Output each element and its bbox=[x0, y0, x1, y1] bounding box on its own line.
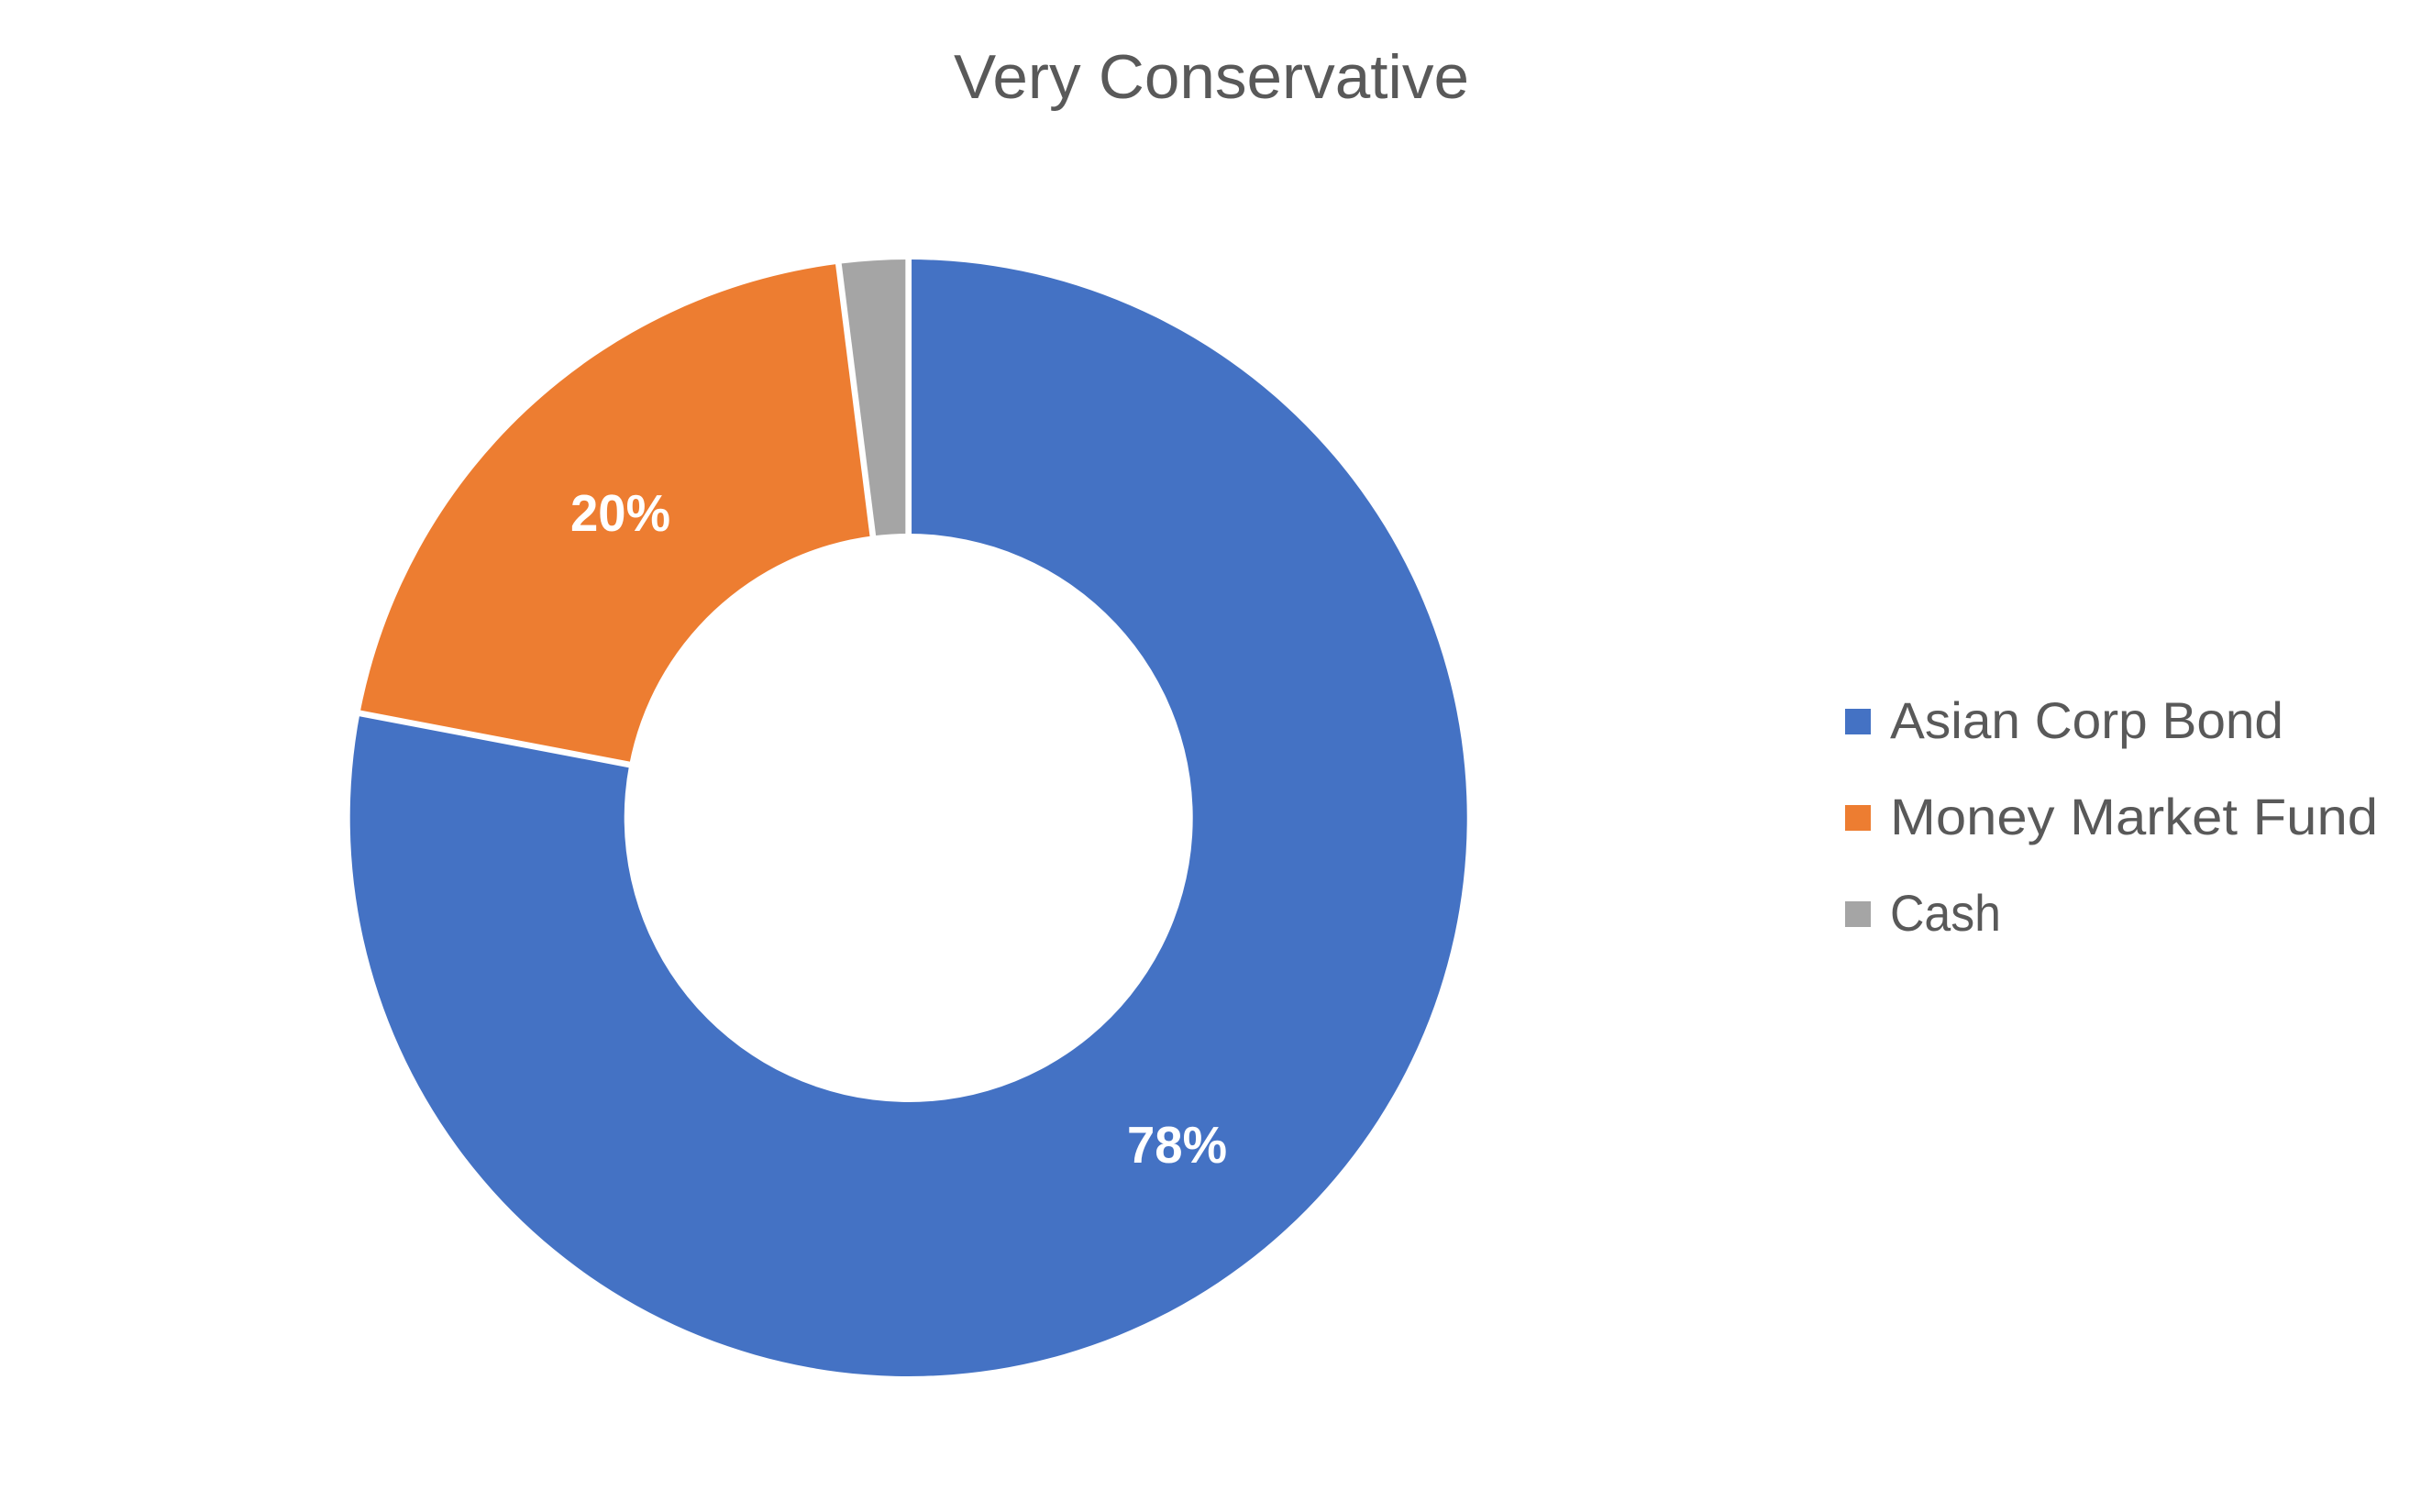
legend item: Money Market Fund: Money Market Fund bbox=[1890, 788, 2378, 845]
legend bbox=[1845, 691, 2378, 942]
title: Very Conservative bbox=[954, 42, 1469, 112]
data label: 78%: 78% bbox=[1127, 1116, 1227, 1175]
legend item: Cash bbox=[1845, 884, 2001, 942]
slice: Cash 2% bbox=[838, 259, 909, 535]
legend item: Cash: Cash bbox=[1890, 884, 2001, 942]
donut chart bbox=[350, 252, 1467, 1376]
slice: Asian Corp Bond 78% bbox=[350, 259, 1467, 1376]
slice: Money Market Fund 20% bbox=[359, 264, 873, 765]
legend item: Asian Corp Bond: Asian Corp Bond bbox=[1890, 691, 2283, 749]
data label: 20%: 20% bbox=[570, 484, 670, 543]
